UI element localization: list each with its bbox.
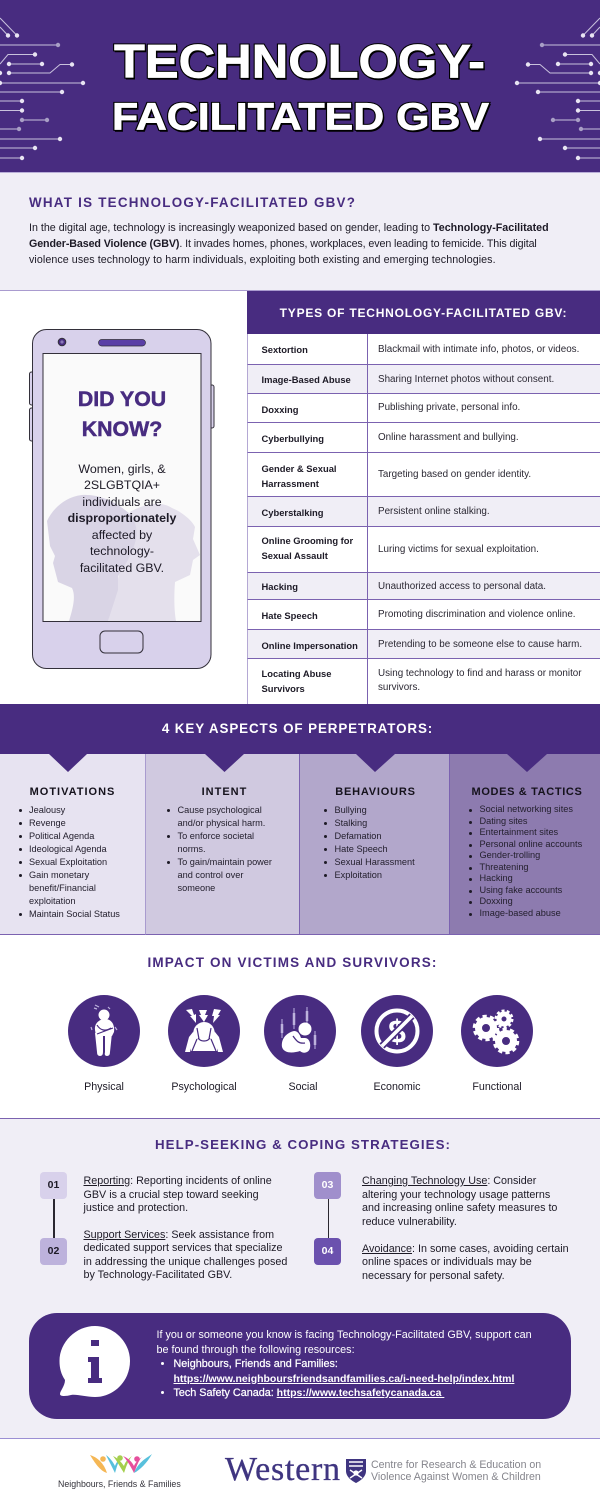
connector left bbox=[53, 1198, 54, 1239]
modes and tactics list: Entertainment sites bbox=[480, 827, 558, 837]
step 04 badge bbox=[314, 1238, 341, 1265]
intent list: Cause psychological bbox=[178, 805, 262, 815]
callout resource bullets: Tech Safety Canada: https://www.techsafetycanada.ca bbox=[174, 1387, 441, 1399]
row: online impersonation: Pretending to be someone else to cause harm. bbox=[378, 638, 582, 650]
label: functional: Functional bbox=[472, 1081, 522, 1093]
step 04 text: online spaces or individuals may be bbox=[362, 1256, 532, 1268]
row: image-based abuse: Image-Based Abuse bbox=[262, 374, 351, 384]
intent list: norms. bbox=[178, 844, 206, 854]
motivations list: Political Agenda bbox=[29, 831, 94, 841]
step 03 text: reduce vulnerability. bbox=[362, 1216, 457, 1228]
row: doxxing: Publishing private, personal info. bbox=[378, 402, 520, 412]
row: locating abuse survivors: Using technology to find and harass or monitor bbox=[378, 668, 582, 678]
modes and tactics list: Doxxing bbox=[480, 896, 513, 906]
callout text bbox=[156, 1329, 532, 1356]
intro paragraph: Gender-Based Violence (GBV). It invades homes, phones, workplaces, even leading to femicide. This digital bbox=[29, 238, 537, 250]
row: doxxing: Doxxing bbox=[262, 404, 298, 415]
behaviours list bbox=[324, 805, 415, 880]
did you know text: affected by bbox=[92, 528, 152, 542]
intent heading: INTENT bbox=[202, 786, 247, 798]
motivations list: exploitation bbox=[29, 896, 75, 906]
callout resource bullets: https://www.neighboursfriendsandfamilies.ca/i-need-help/index.html bbox=[174, 1372, 514, 1384]
row: doxxing bbox=[247, 394, 600, 423]
motivations list: Gain monetary bbox=[29, 870, 89, 880]
label: physical: Physical bbox=[84, 1081, 124, 1093]
did you know text: individuals are bbox=[82, 495, 162, 509]
circuit decoration left bbox=[0, 18, 86, 160]
phone illustration bbox=[29, 329, 214, 669]
Western wordmark: Western bbox=[225, 1451, 341, 1488]
heading: did you know: KNOW? bbox=[82, 416, 162, 440]
did you know text: disproportionately bbox=[68, 511, 176, 525]
panel: did you know phone bbox=[0, 291, 246, 704]
behaviours list: Exploitation bbox=[334, 870, 382, 880]
row: image-based abuse: Sharing Internet photos without consent. bbox=[378, 374, 554, 384]
step 03 text bbox=[362, 1175, 557, 1228]
icon: economic: $ bbox=[388, 1014, 406, 1050]
step 01 text bbox=[83, 1175, 272, 1214]
modes and tactics list: Threatening bbox=[480, 862, 529, 872]
row: sextortion: Blackmail with intimate info, photos, or videos. bbox=[378, 344, 579, 354]
panel: 4 key aspects bbox=[0, 704, 600, 935]
row: hacking bbox=[247, 573, 600, 600]
step 02 text: dedicated support services that specialize bbox=[84, 1242, 282, 1254]
intro paragraph: violence uses technology to harm individuals, exploiting both existing and emerging technologies. bbox=[29, 254, 496, 266]
modes and tactics list: Gender-trolling bbox=[480, 850, 540, 860]
behaviours list: Defamation bbox=[334, 831, 381, 841]
column: behaviours bbox=[300, 754, 450, 935]
did you know text bbox=[68, 462, 176, 575]
intent list: someone bbox=[178, 883, 215, 893]
row: gender and sexual harassment: Harrassment bbox=[262, 478, 319, 489]
step 02 badge bbox=[40, 1238, 67, 1265]
step 01 text: GBV is a crucial step toward seeking bbox=[84, 1188, 259, 1200]
row: online grooming bbox=[247, 527, 600, 573]
row: locating abuse survivors: survivors. bbox=[378, 682, 420, 692]
modes and tactics list: Using fake accounts bbox=[480, 884, 562, 894]
logo wordmark: Neighbours, Friends & Families bbox=[58, 1478, 181, 1488]
behaviours list: Bullying bbox=[334, 805, 367, 815]
row: image-based abuse bbox=[247, 365, 600, 394]
panel: impact on victims bbox=[0, 936, 600, 1119]
intent list: and control over bbox=[178, 870, 243, 880]
callout text: be found through the following resources: bbox=[156, 1344, 355, 1356]
logo: western centre bbox=[224, 1451, 541, 1488]
icon: functional bbox=[461, 995, 533, 1067]
row: sextortion: Sextortion bbox=[262, 344, 308, 354]
step 04 badge: 04 bbox=[322, 1245, 333, 1257]
intent list: and/or physical harm. bbox=[178, 818, 265, 828]
row: hate speech bbox=[247, 600, 600, 630]
did you know text: Women, girls, & bbox=[78, 462, 166, 476]
title: FACILITATED GBV bbox=[113, 98, 491, 140]
callout resource bullets: Neighbours, Friends and Families: bbox=[174, 1358, 338, 1370]
row: cyberbullying: Online harassment and bullying. bbox=[378, 432, 519, 442]
circuit decoration right bbox=[514, 18, 600, 160]
column: intent bbox=[146, 754, 300, 935]
logo mark bbox=[90, 1454, 152, 1473]
intent list: To enforce societal bbox=[178, 831, 254, 841]
step 04 text: Avoidance: In some cases, avoiding certain bbox=[362, 1242, 569, 1254]
logo: neighbours friends and families bbox=[58, 1454, 181, 1489]
step 01 text: justice and protection. bbox=[84, 1202, 188, 1214]
step 01 text: Reporting: Reporting incidents of online bbox=[84, 1175, 272, 1187]
footer logos bbox=[0, 1440, 600, 1499]
row: online impersonation: Online Impersonation bbox=[262, 640, 358, 651]
table column divider bbox=[367, 334, 368, 704]
centre name bbox=[371, 1458, 541, 1483]
step 04 text: necessary for personal safety. bbox=[362, 1270, 505, 1282]
motivations list: Sexual Exploitation bbox=[29, 857, 107, 867]
step 03 badge bbox=[314, 1172, 341, 1199]
label: social: Social bbox=[288, 1081, 318, 1093]
motivations list: Maintain Social Status bbox=[29, 909, 120, 919]
column: motivations bbox=[0, 754, 146, 935]
heading: what is TFGBV: WHAT IS TECHNOLOGY-FACILITATED GBV? bbox=[29, 195, 356, 210]
icon: physical bbox=[68, 995, 140, 1067]
motivations list: Jealousy bbox=[29, 805, 65, 815]
row: online grooming: Sexual Assault bbox=[262, 550, 328, 561]
header banner bbox=[0, 0, 600, 173]
step 02 text: by Technology-Facilitated GBV. bbox=[84, 1269, 232, 1281]
modes and tactics list bbox=[469, 804, 582, 918]
step 04 text bbox=[362, 1242, 569, 1282]
modes and tactics list: Personal online accounts bbox=[480, 838, 582, 848]
behaviours heading: BEHAVIOURS bbox=[335, 786, 416, 798]
row: hacking: Unauthorized access to personal data. bbox=[378, 580, 546, 592]
did you know text: facilitated GBV. bbox=[80, 561, 164, 575]
row: gender and sexual harassment bbox=[247, 453, 600, 497]
modes and tactics list: Image-based abuse bbox=[480, 908, 561, 918]
heading: did you know bbox=[78, 387, 166, 440]
intro paragraph: In the digital age, technology is increasingly weaponized based on gender, leading to Technology-Facilitated bbox=[29, 222, 549, 234]
row: cyberstalking: Persistent online stalking. bbox=[378, 506, 490, 516]
motivations list: Ideological Agenda bbox=[29, 844, 107, 854]
modes and tactics heading: MODES & TACTICS bbox=[472, 786, 582, 798]
row: hate speech: Promoting discrimination and violence online. bbox=[378, 608, 576, 620]
heading band with arrows bbox=[0, 704, 600, 772]
table heading: TYPES OF TECHNOLOGY-FACILITATED GBV: bbox=[280, 306, 567, 320]
row: hate speech: Hate Speech bbox=[262, 610, 318, 621]
panel: what is TFGBV bbox=[0, 173, 600, 291]
label: economic: Economic bbox=[374, 1081, 420, 1093]
icon: economic bbox=[361, 995, 433, 1067]
modes and tactics list: Hacking bbox=[480, 873, 513, 883]
title: TECHNOLOGY- bbox=[114, 34, 485, 88]
step 01 badge bbox=[40, 1172, 67, 1199]
row: cyberbullying bbox=[247, 423, 600, 453]
column: modes and tactics bbox=[450, 754, 600, 935]
row: locating abuse survivors: Survivors bbox=[262, 683, 305, 694]
modes and tactics list: Dating sites bbox=[480, 816, 528, 826]
heading: help-seeking: HELP-SEEKING & COPING STRATEGIES: bbox=[155, 1137, 451, 1152]
motivations list: benefit/Financial bbox=[29, 883, 96, 893]
intent list: To gain/maintain power bbox=[178, 857, 272, 867]
row: hacking: Hacking bbox=[262, 580, 298, 592]
icon: psychological bbox=[168, 995, 240, 1067]
callout resource bullets bbox=[161, 1358, 514, 1399]
row: locating abuse survivors: Locating Abuse bbox=[262, 668, 331, 679]
row: cyberstalking bbox=[247, 497, 600, 527]
heading: impact: IMPACT ON VICTIMS AND SURVIVORS: bbox=[147, 954, 438, 970]
centre name: Centre for Research & Education on bbox=[371, 1458, 541, 1470]
icon: social bbox=[264, 995, 336, 1067]
step 02 text bbox=[84, 1228, 287, 1281]
label: psychological: Psychological bbox=[171, 1081, 237, 1093]
title: TECHNOLOGY- bbox=[114, 34, 485, 88]
heading: 4 key aspects: 4 KEY ASPECTS OF PERPETRATORS: bbox=[162, 720, 433, 736]
did you know text: technology- bbox=[90, 544, 154, 558]
motivations list bbox=[19, 805, 120, 919]
icon: info speech bubble bbox=[60, 1326, 130, 1397]
panel: help-seeking strategies bbox=[0, 1119, 600, 1439]
title: FACILITATED GBV bbox=[112, 96, 490, 138]
intro paragraph bbox=[29, 222, 549, 266]
step 02 text: in addressing the unique challenges posed bbox=[84, 1256, 287, 1268]
behaviours list: Sexual Harassment bbox=[334, 857, 415, 867]
row: online impersonation bbox=[247, 630, 600, 659]
centre name: Violence Against Women & Children bbox=[371, 1471, 541, 1483]
row: locating abuse survivors bbox=[247, 659, 600, 704]
heading: did you know: DID YOU bbox=[78, 387, 166, 411]
step 03 text: and increasing online safety measures to bbox=[362, 1202, 557, 1214]
modes and tactics list: Social networking sites bbox=[480, 804, 573, 814]
row: cyberbullying: Cyberbullying bbox=[262, 433, 324, 444]
row: online grooming: Online Grooming for bbox=[262, 535, 353, 546]
step 03 badge: 03 bbox=[322, 1179, 333, 1191]
callout: resources bbox=[29, 1313, 571, 1419]
motivations heading: MOTIVATIONS bbox=[30, 786, 115, 798]
title bbox=[112, 34, 491, 140]
panel: types table bbox=[247, 291, 600, 704]
crest bbox=[346, 1459, 366, 1483]
row: gender and sexual harassment: Targeting based on gender identity. bbox=[378, 468, 531, 480]
title: TECHNOLOGY- bbox=[115, 36, 486, 89]
behaviours list: Stalking bbox=[334, 818, 367, 828]
step 03 text: Changing Technology Use: Consider bbox=[362, 1175, 536, 1187]
behaviours list: Hate Speech bbox=[334, 844, 388, 854]
motivations list: Revenge bbox=[29, 818, 66, 828]
callout text: If you or someone you know is facing Technology-Facilitated GBV, support can bbox=[156, 1329, 532, 1341]
step 02 text: Support Services: Seek assistance from bbox=[84, 1228, 274, 1240]
step 03 text: altering your technology usage patterns bbox=[362, 1188, 550, 1200]
step 01 badge: 01 bbox=[48, 1179, 59, 1191]
title: FACILITATED GBV bbox=[112, 96, 490, 138]
connector right bbox=[328, 1198, 329, 1239]
row: gender and sexual harassment: Gender & Sexual bbox=[262, 463, 337, 474]
did you know text: 2SLGBTQIA+ bbox=[84, 478, 160, 492]
row: online grooming: Luring victims for sexual exploitation. bbox=[378, 544, 539, 555]
row: cyberstalking: Cyberstalking bbox=[262, 507, 324, 518]
table heading bbox=[247, 291, 600, 334]
row: sextortion bbox=[247, 334, 600, 365]
intent list bbox=[167, 805, 272, 893]
step 02 badge: 02 bbox=[48, 1245, 59, 1257]
